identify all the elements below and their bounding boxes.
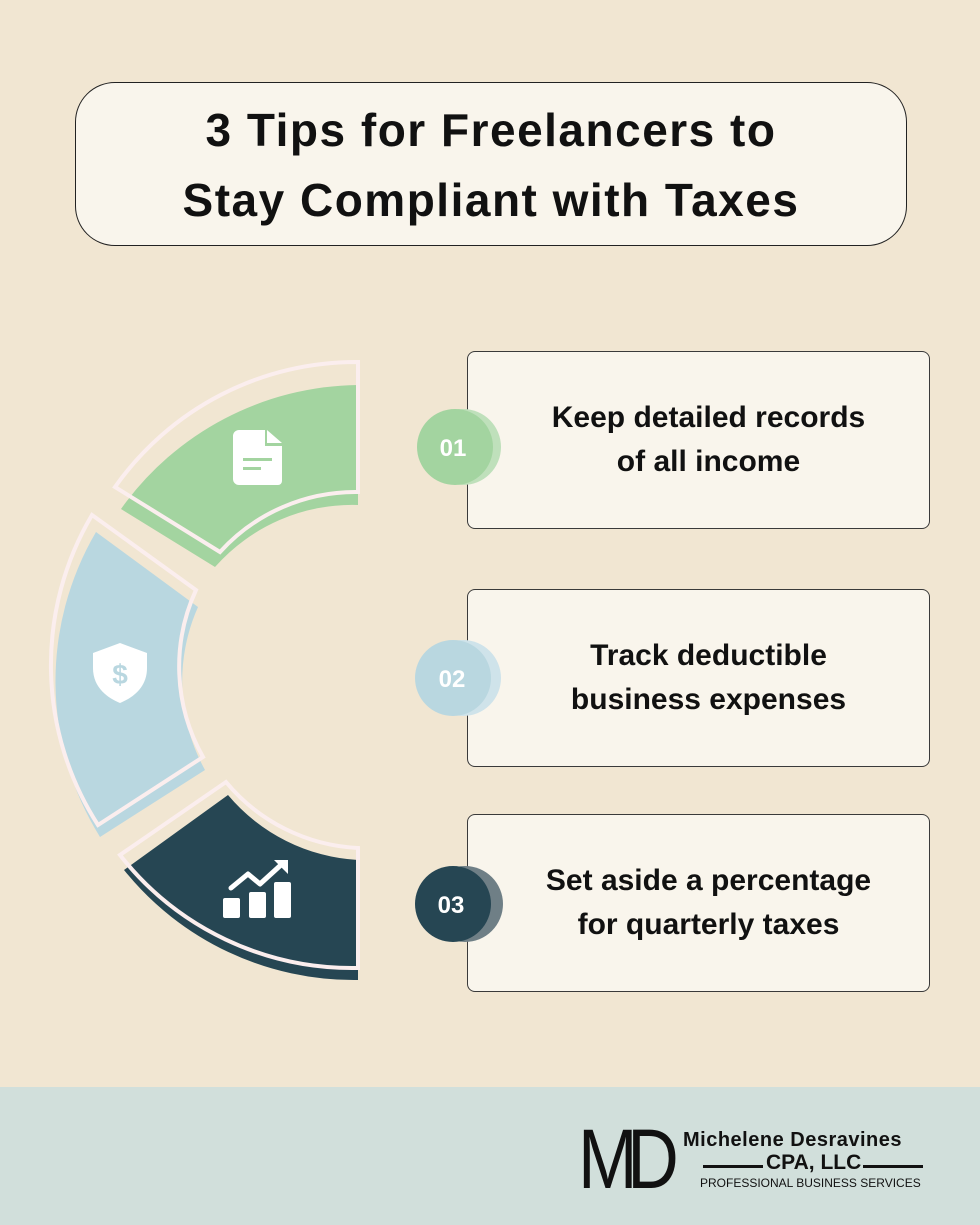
badge 01: 01 [440,435,466,462]
badge 03 [415,866,503,942]
tip 1 box: of all income [617,445,800,478]
tip 3 box: Set aside a percentage [546,864,871,897]
logo [578,1112,923,1206]
tip 1 box [467,351,930,529]
logo: MD [578,1112,669,1206]
tip 2 box [467,589,930,767]
title [75,82,907,246]
icon: growth chart [223,860,291,918]
badge 02 [415,640,501,716]
icon: document [233,430,282,485]
footer [0,1087,980,1225]
segment: expenses (blue) [51,515,205,837]
badge 03: 03 [438,892,464,919]
tip 3 box [467,814,930,992]
badge 02: 02 [439,666,465,693]
tip 3 box: for quarterly taxes [578,908,839,941]
icon: shield dollar: $ [112,659,128,690]
icon: shield dollar [93,643,147,703]
badge 01 [417,409,501,485]
tip 2 box: business expenses [571,683,846,716]
segment: taxes (dark) [120,782,358,980]
logo: CPA, LLC [766,1151,861,1174]
tip 2 box: Track deductible [590,639,827,672]
segment: records (green) [115,362,358,567]
tip 1 box: Keep detailed records [552,401,865,434]
logo: Michelene Desravines [683,1129,902,1151]
logo: PROFESSIONAL BUSINESS SERVICES [700,1176,921,1190]
title: Stay Compliant with Taxes [183,174,799,226]
title: 3 Tips for Freelancers to [206,104,776,156]
